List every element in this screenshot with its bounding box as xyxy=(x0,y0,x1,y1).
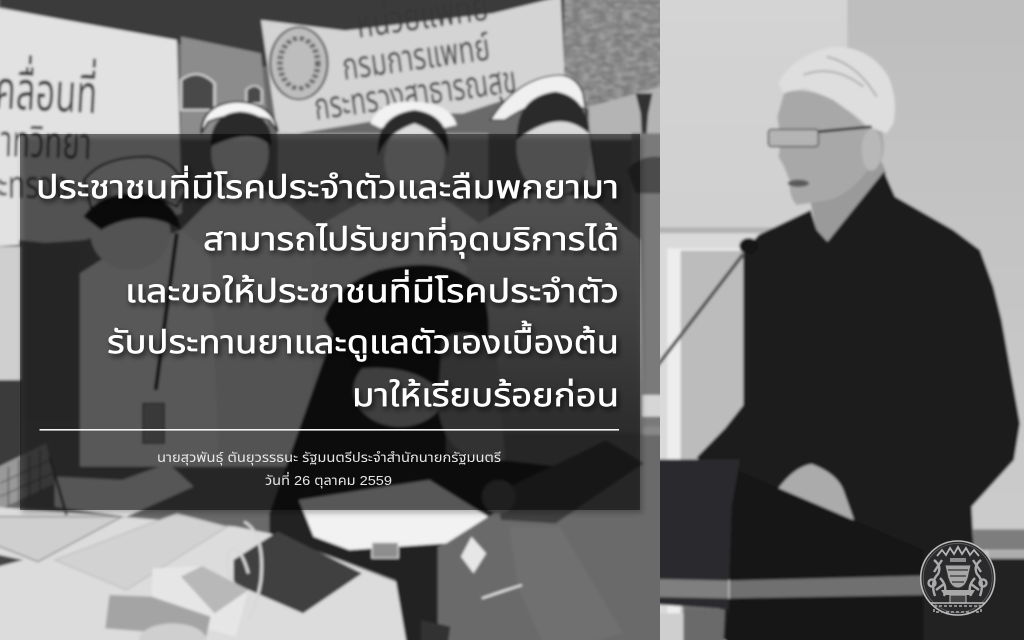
seal pedestal xyxy=(930,590,985,612)
seal emblem xyxy=(921,541,995,615)
monitor box xyxy=(152,566,248,637)
podium base xyxy=(683,607,725,640)
dark uniform in foreground xyxy=(268,334,551,640)
face xyxy=(777,90,884,205)
nurse one, writing xyxy=(78,154,184,468)
right white banner xyxy=(261,0,565,137)
neck xyxy=(810,143,887,242)
people, table and equipment xyxy=(0,75,682,640)
officer uniform xyxy=(436,501,590,640)
tree foliage xyxy=(562,0,660,122)
main quote xyxy=(36,165,619,413)
man at right edge xyxy=(629,132,660,426)
seal guardian lions xyxy=(928,560,986,596)
suit xyxy=(697,172,1020,640)
podium stripe xyxy=(640,576,923,599)
photo: nurses at a medical service point xyxy=(0,0,690,640)
hair xyxy=(778,47,895,133)
medicine pack xyxy=(105,595,210,637)
left white banner xyxy=(0,7,182,247)
table surface xyxy=(0,507,410,640)
basket xyxy=(0,443,55,513)
banner lettering: ะทรวง xyxy=(0,164,69,207)
podium side xyxy=(640,459,740,609)
watch xyxy=(482,480,511,513)
divider rule xyxy=(40,429,619,431)
speaker name and title: นายสุวพันธุ์ ตันยุวรรธนะ รัฐมนตรีประจำสำนักนายกรัฐมนตรี xyxy=(157,450,501,465)
hand xyxy=(139,623,206,640)
collar insignia xyxy=(461,537,522,598)
monitor tubing xyxy=(232,520,266,596)
left dark area behind nurse one xyxy=(0,239,42,466)
name badge xyxy=(372,543,398,558)
blood pressure cuff xyxy=(234,532,362,613)
nurse four xyxy=(463,75,644,433)
right wall ledge xyxy=(920,529,1024,640)
banner lettering xyxy=(0,0,519,207)
forearm and hand, writing xyxy=(55,463,194,517)
wall trim and panel xyxy=(660,226,773,614)
foreground hair xyxy=(324,264,490,340)
paperwork xyxy=(0,517,122,562)
quote line 3: และขอให้ประชาชนที่มีโรคประจำตัว xyxy=(125,269,619,309)
pen xyxy=(54,475,69,516)
tent canopy and banners xyxy=(0,0,690,247)
attribution xyxy=(157,450,501,488)
nurse three xyxy=(318,100,478,306)
quote line 1: ประชาชนที่มีโรคประจำตัวและลืมพกยามา xyxy=(36,165,619,205)
banner lettering: กระทรวงสาธารณสุข xyxy=(311,58,519,129)
quote line 5: มาให้เรียบร้อยก่อน xyxy=(352,377,619,413)
dark translucent text panel xyxy=(20,134,640,510)
foreground face xyxy=(352,366,439,428)
seal urn xyxy=(945,558,971,588)
pale forearm over uniform xyxy=(299,480,488,550)
banner lettering: กรมการแพทย์ xyxy=(339,26,493,88)
quote line 2: สามารถไปรับยาที่จุดบริการได้ xyxy=(203,217,619,258)
banner lettering: าทวิทยา xyxy=(0,116,92,169)
microphone xyxy=(657,238,758,367)
item at right edge xyxy=(640,393,660,418)
podium front xyxy=(723,467,923,640)
officer head xyxy=(438,332,505,461)
street lamp xyxy=(636,93,652,140)
eyeglasses xyxy=(768,127,872,147)
nurse two xyxy=(180,100,316,468)
quote line 4: รับประทานยาและดูแลตัวเองเบื้องต้น xyxy=(107,320,619,362)
wall xyxy=(660,0,850,244)
seal flame crest xyxy=(937,547,979,556)
date: วันที่ 26 ตุลาคม 2559 xyxy=(265,471,392,488)
banner seal xyxy=(270,27,327,99)
photo: speaker at a podium xyxy=(640,0,1024,640)
hand xyxy=(776,464,854,520)
